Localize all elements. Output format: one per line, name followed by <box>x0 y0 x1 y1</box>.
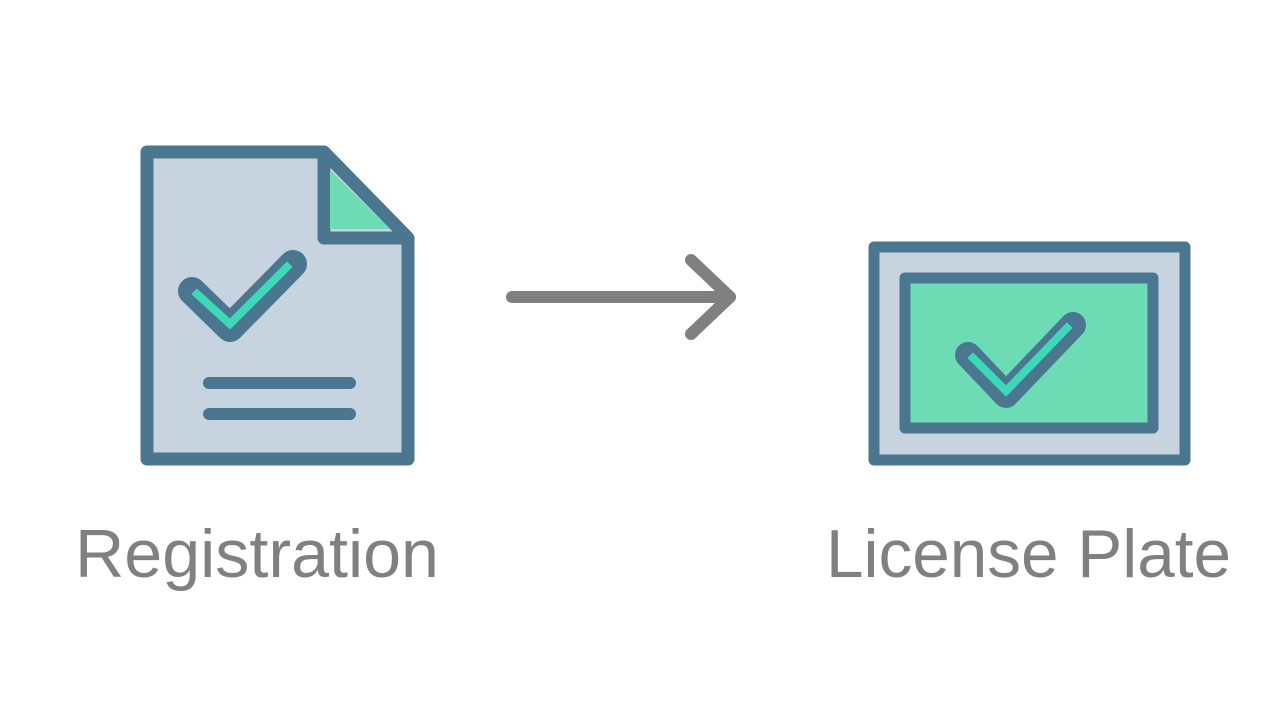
label: Registration: Registration <box>75 516 439 592</box>
icon: registration document <box>147 152 408 459</box>
icon: document checkmark <box>192 264 293 328</box>
icon: document text lines <box>209 383 350 414</box>
arrow <box>512 260 730 334</box>
icon: plate checkmark <box>968 325 1073 395</box>
icon: folded corner <box>324 152 408 238</box>
icon: license plate <box>874 247 1185 460</box>
label: License Plate: License Plate <box>826 516 1231 592</box>
